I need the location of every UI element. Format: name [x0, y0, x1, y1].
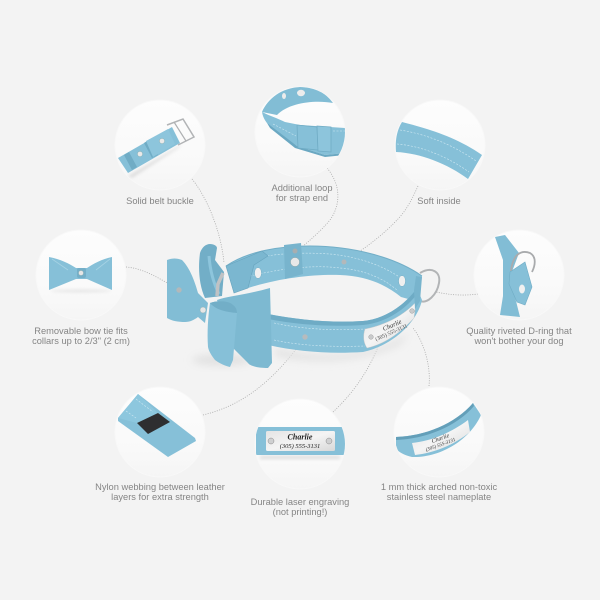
- nameplate: (305) 555-3131: [374, 322, 409, 343]
- D-ring: [420, 270, 439, 302]
- thumbnail circle: [36, 230, 126, 320]
- soft lining image: [396, 122, 482, 179]
- back strap stitching: [240, 253, 405, 291]
- buckle strap image: [118, 119, 194, 178]
- engraved plate image: (305) 555-3131: [280, 443, 320, 450]
- caption: for strap end: [276, 193, 328, 203]
- strap holes: [254, 260, 406, 286]
- thumbnail circle: [474, 230, 564, 320]
- leader line: nylon webbing: [203, 337, 305, 415]
- collar shadow: [275, 332, 410, 361]
- panel: nameplate: [381, 387, 497, 502]
- thumbnail circle: [395, 100, 485, 190]
- leader line: bow tie: [126, 267, 178, 290]
- caption: [95, 482, 225, 502]
- front strap stitching: [274, 323, 365, 346]
- caption: Soft inside: [417, 196, 461, 206]
- arched nameplate image: (305) 555-3131: [425, 438, 456, 453]
- bow shadow: [192, 354, 252, 366]
- leader line: loop: [296, 168, 338, 252]
- caption: [272, 183, 332, 203]
- bow right wing: [217, 288, 272, 368]
- D-ring image: [495, 235, 535, 317]
- nylon webbing image: [118, 394, 196, 457]
- main collar illustration: [167, 243, 439, 368]
- panel: soft inside: [395, 100, 485, 206]
- side release clip: [226, 251, 268, 293]
- caption: layers for extra strength: [111, 492, 209, 502]
- leader line: soft inside: [344, 186, 418, 262]
- caption: won't bother your dog: [473, 336, 564, 346]
- bow left wing: [167, 258, 208, 323]
- leader line: engraving: [333, 347, 378, 412]
- caption: stainless steel nameplate: [387, 492, 491, 502]
- caption: Additional loop: [272, 183, 332, 193]
- bow tie image: [49, 257, 112, 292]
- strap rivet: [302, 334, 308, 340]
- arched nameplate image: Charlie: [431, 433, 451, 445]
- caption: 1 mm thick arched non-toxic: [381, 482, 497, 492]
- front strap: [268, 288, 422, 353]
- thumbnail circle: [115, 100, 205, 190]
- caption: [32, 326, 130, 346]
- metal clasp: [217, 273, 223, 296]
- panel: D-ring: [466, 230, 572, 346]
- caption: Nylon webbing between leather: [95, 482, 225, 492]
- thumbnail circle: [394, 387, 484, 477]
- caption: (not printing!): [273, 507, 327, 517]
- thumbnail circle: [255, 399, 345, 489]
- caption: [381, 482, 497, 502]
- caption: collars up to 2/3" (2 cm): [32, 336, 130, 346]
- thumbnail circle: [115, 387, 205, 477]
- caption: Solid belt buckle: [126, 196, 194, 206]
- back strap: [226, 246, 422, 302]
- arched nameplate image: [396, 403, 481, 457]
- caption: Quality riveted D-ring that: [466, 326, 572, 336]
- bow rivet: [200, 307, 206, 313]
- panel: laser engraving: [251, 399, 349, 517]
- caption: [251, 497, 349, 517]
- leader line: nameplate: [413, 328, 429, 386]
- leader line: buckle: [192, 179, 224, 263]
- thumbnail circle: [255, 87, 345, 177]
- panel: bow tie: [32, 230, 130, 346]
- leader line: D-ring: [436, 292, 478, 295]
- caption: Removable bow tie fits: [34, 326, 128, 336]
- nameplate: Charlie: [382, 318, 403, 333]
- strap keeper with rivet: [284, 243, 303, 279]
- caption: Durable laser engraving: [251, 497, 349, 507]
- nameplate: [364, 302, 416, 348]
- bow front loop: [208, 301, 237, 367]
- engraved plate image: [256, 427, 345, 459]
- caption: [466, 326, 572, 346]
- loop strap image: [262, 87, 345, 157]
- panel: solid belt buckle: [115, 100, 205, 206]
- bow tie: [167, 244, 272, 368]
- engraved plate image: Charlie: [288, 432, 313, 442]
- D-ring tab: [414, 276, 422, 309]
- bow back wing: [199, 244, 224, 298]
- panel: nylon webbing: [95, 387, 225, 502]
- panel: additional loop: [255, 87, 345, 203]
